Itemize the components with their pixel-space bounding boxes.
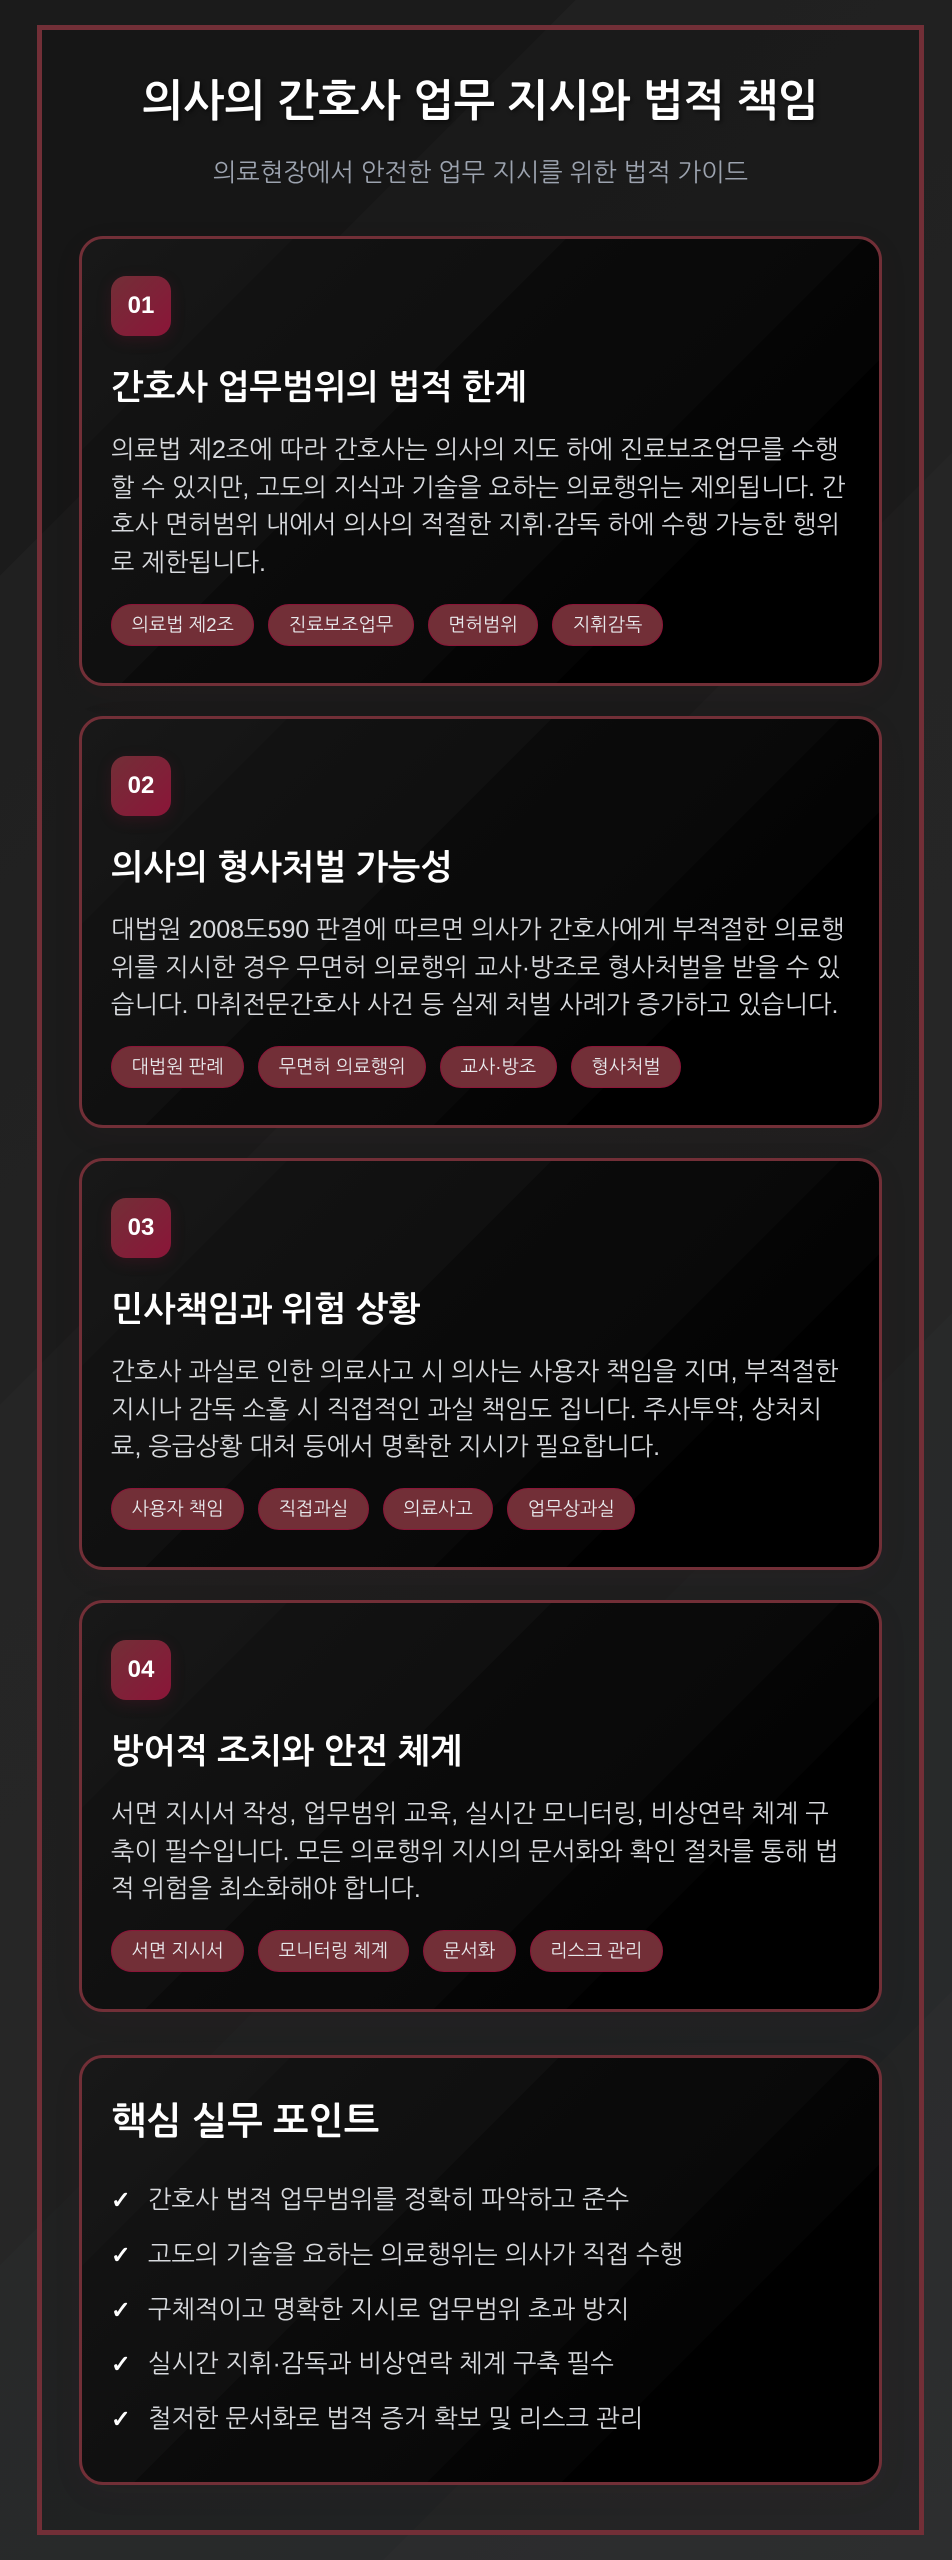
heading 01: 간호사 업무범위의 법적 한계	[111, 369, 526, 407]
text 02: 습니다. 마취전문간호사 사건 등 실제 처벌 사례가 증가하고 있습니다.	[111, 991, 838, 1019]
tags 04: 서면 지시서	[132, 1940, 224, 1961]
text 02: 위를 지시한 경우 무면허 의료행위 교사·방조로 형사처벌을 받을 수 있	[111, 954, 840, 982]
tags 02: 무면허 의료행위	[279, 1056, 405, 1077]
point 3: ✓	[111, 2297, 131, 2323]
heading 02: 의사의 형사처벌 가능성	[111, 849, 452, 887]
badge 04: 04	[128, 1656, 154, 1683]
point 2: 고도의 기술을 요하는 의료행위는 의사가 직접 수행	[148, 2241, 683, 2269]
badge 03	[111, 1198, 171, 1258]
point 1: ✓	[111, 2187, 131, 2213]
badge 01: 01	[128, 292, 154, 319]
heading 03: 민사책임과 위험 상황	[111, 1291, 420, 1329]
point 5: 철저한 문서화로 법적 증거 확보 및 리스크 관리	[148, 2405, 643, 2433]
text 04: 축이 필수입니다. 모든 의료행위 지시의 문서화와 확인 절차를 통해 법	[111, 1838, 838, 1866]
tags 01	[111, 604, 663, 646]
tags 02: 교사·방조	[460, 1056, 536, 1077]
badge 02: 02	[128, 772, 154, 799]
subtitle: 의료현장에서 안전한 업무 지시를 위한 법적 가이드	[213, 159, 748, 187]
text 02: 대법원 2008도590 판결에 따르면 의사가 간호사에게 부적절한 의료행	[111, 916, 844, 944]
point 1: 간호사 법적 업무범위를 정확히 파악하고 준수	[148, 2186, 629, 2214]
badge 04	[111, 1640, 171, 1700]
tags 01: 진료보조업무	[289, 614, 393, 635]
tags 03: 업무상과실	[528, 1498, 615, 1519]
text 01	[111, 436, 845, 576]
point 5: ✓	[111, 2406, 131, 2432]
tags 03: 의료사고	[403, 1498, 473, 1519]
tags 01: 면허범위	[448, 614, 518, 635]
point 4: 실시간 지휘·감독과 비상연락 체계 구축 필수	[148, 2350, 614, 2378]
badge 01	[111, 276, 171, 336]
tags 04: 리스크 관리	[550, 1940, 642, 1961]
tags 02: 대법원 판례	[132, 1056, 224, 1077]
text 04: 적 위험을 최소화해야 합니다.	[111, 1875, 421, 1903]
summary heading: 핵심 실무 포인트	[111, 2100, 379, 2142]
point 2: ✓	[111, 2242, 131, 2268]
tags 02: 형사처벌	[591, 1056, 661, 1077]
heading 04: 방어적 조치와 안전 체계	[111, 1733, 462, 1771]
tags 03	[111, 1488, 635, 1530]
tags 03: 사용자 책임	[132, 1498, 224, 1519]
text 03	[111, 1358, 838, 1461]
text 01: 의료법 제2조에 따라 간호사는 의사의 지도 하에 진료보조업무를 수행	[111, 436, 838, 464]
panel: card 02	[79, 716, 882, 1128]
text 04: 서면 지시서 작성, 업무범위 교육, 실시간 모니터링, 비상연락 체계 구	[111, 1800, 829, 1828]
text 03: 지시나 감독 소홀 시 직접적인 과실 책임도 집니다. 주사투약, 상처치	[111, 1396, 822, 1424]
tags 01: 의료법 제2조	[132, 614, 234, 635]
tags 04: 모니터링 체계	[279, 1940, 388, 1961]
text 01: 할 수 있지만, 고도의 지식과 기술을 요하는 의료행위는 제외됩니다. 간	[111, 474, 845, 502]
tags 02	[111, 1046, 681, 1088]
panel: key practical points	[79, 2055, 882, 2485]
text 02	[111, 916, 844, 1019]
text 04	[111, 1800, 838, 1903]
text 03: 료, 응급상황 대처 등에서 명확한 지시가 필요합니다.	[111, 1433, 660, 1461]
panel: card 03	[79, 1158, 882, 1570]
tags 03: 직접과실	[279, 1498, 348, 1519]
badge 03: 03	[128, 1214, 154, 1241]
tags 04	[111, 1930, 663, 1972]
point 4: ✓	[111, 2351, 131, 2377]
tags 04: 문서화	[443, 1940, 495, 1961]
point 3: 구체적이고 명확한 지시로 업무범위 초과 방지	[148, 2296, 629, 2324]
badge 02	[111, 756, 171, 816]
tags 01: 지휘감독	[573, 614, 642, 635]
text 01: 로 제한됩니다.	[111, 548, 266, 576]
panel: card 01	[79, 236, 882, 686]
text 01: 호사 면허범위 내에서 의사의 적절한 지휘·감독 하에 수행 가능한 행위	[111, 511, 840, 539]
text 03: 간호사 과실로 인한 의료사고 시 의사는 사용자 책임을 지며, 부적절한	[111, 1358, 838, 1386]
title: 의사의 간호사 업무 지시와 법적 책임	[142, 77, 819, 126]
panel: card 04	[79, 1600, 882, 2012]
